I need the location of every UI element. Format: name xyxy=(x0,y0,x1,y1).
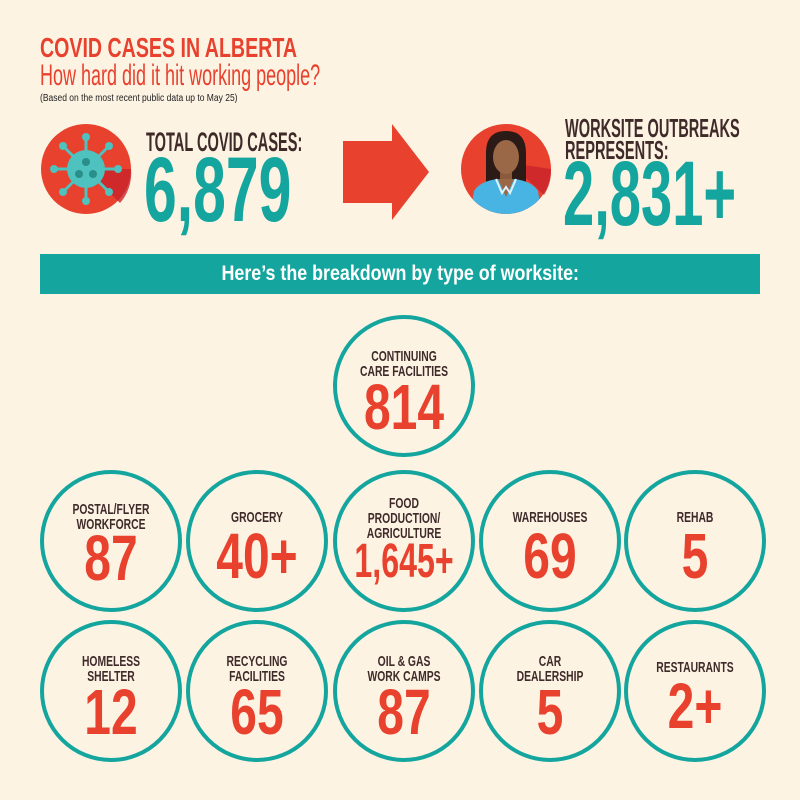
total cases label: TOTAL COVID CASES: xyxy=(146,127,302,157)
circle: postal: 87 xyxy=(84,522,138,594)
title: COVID CASES IN ALBERTA xyxy=(40,32,297,63)
circle: grocery: 40+ xyxy=(216,520,298,592)
circle: restaurants: 2+ xyxy=(668,670,722,742)
circle: food: PRODUCTION/ xyxy=(368,510,440,527)
worksite number: 2,831+ xyxy=(563,143,736,245)
circle: continuing care: 814 xyxy=(364,371,444,443)
icon: worker xyxy=(461,124,551,214)
icon: virus xyxy=(41,124,132,214)
banner xyxy=(40,254,760,294)
circle: recycling: FACILITIES xyxy=(229,668,285,685)
circle: rehab: 5 xyxy=(682,520,708,592)
circle: rehab: REHAB xyxy=(677,509,713,526)
circle: recycling xyxy=(186,620,328,762)
circle: postal xyxy=(40,470,182,612)
circle: recycling: RECYCLING xyxy=(227,653,287,670)
circle: oil gas: WORK CAMPS xyxy=(367,668,441,685)
total cases number: 6,879 xyxy=(144,139,291,241)
circle: continuing care: CARE FACILITIES xyxy=(360,363,448,380)
circle: warehouses: 69 xyxy=(523,520,577,592)
circle: car dealership xyxy=(479,620,621,762)
circle: homeless: SHELTER xyxy=(87,668,135,685)
circle: continuing care: CONTINUING xyxy=(371,348,437,365)
worksite label: WORKSITE OUTBREAKS xyxy=(565,113,740,143)
worksite label: REPRESENTS: xyxy=(565,135,669,165)
circle: postal: POSTAL/FLYER xyxy=(72,501,150,518)
circle: homeless xyxy=(40,620,182,762)
circle: restaurants: RESTAURANTS xyxy=(656,659,734,676)
circle: grocery xyxy=(186,470,328,612)
circle: warehouses xyxy=(479,470,621,612)
circle: rehab xyxy=(624,470,766,612)
circle: homeless: 12 xyxy=(84,676,138,748)
circle: oil gas: 87 xyxy=(377,676,431,748)
circle: restaurants xyxy=(624,620,766,762)
circle: food: FOOD xyxy=(389,495,419,512)
circle: postal: WORKFORCE xyxy=(76,516,146,533)
circle: car dealership: 5 xyxy=(537,676,563,748)
banner: Here’s the breakdown by type of worksite: xyxy=(221,262,579,285)
circle: continuing care xyxy=(333,315,475,457)
circle: warehouses: WAREHOUSES xyxy=(513,509,587,526)
circle: grocery: GROCERY xyxy=(231,509,283,526)
circle: recycling: 65 xyxy=(230,676,284,748)
arrow xyxy=(343,124,429,220)
subtitle: How hard did it hit working people? xyxy=(40,59,320,92)
circle: food xyxy=(333,470,475,612)
circle: food: 1,645+ xyxy=(354,535,454,588)
note: (Based on the most recent public data up to May 25) xyxy=(40,93,238,104)
worksite label xyxy=(565,113,740,165)
circle: food: AGRICULTURE xyxy=(367,525,441,542)
circle: car dealership: DEALERSHIP xyxy=(517,668,583,685)
circle: oil gas: OIL & GAS xyxy=(378,653,430,670)
circle: oil gas xyxy=(333,620,475,762)
circle: homeless: HOMELESS xyxy=(82,653,140,670)
circle: car dealership: CAR xyxy=(539,653,561,670)
